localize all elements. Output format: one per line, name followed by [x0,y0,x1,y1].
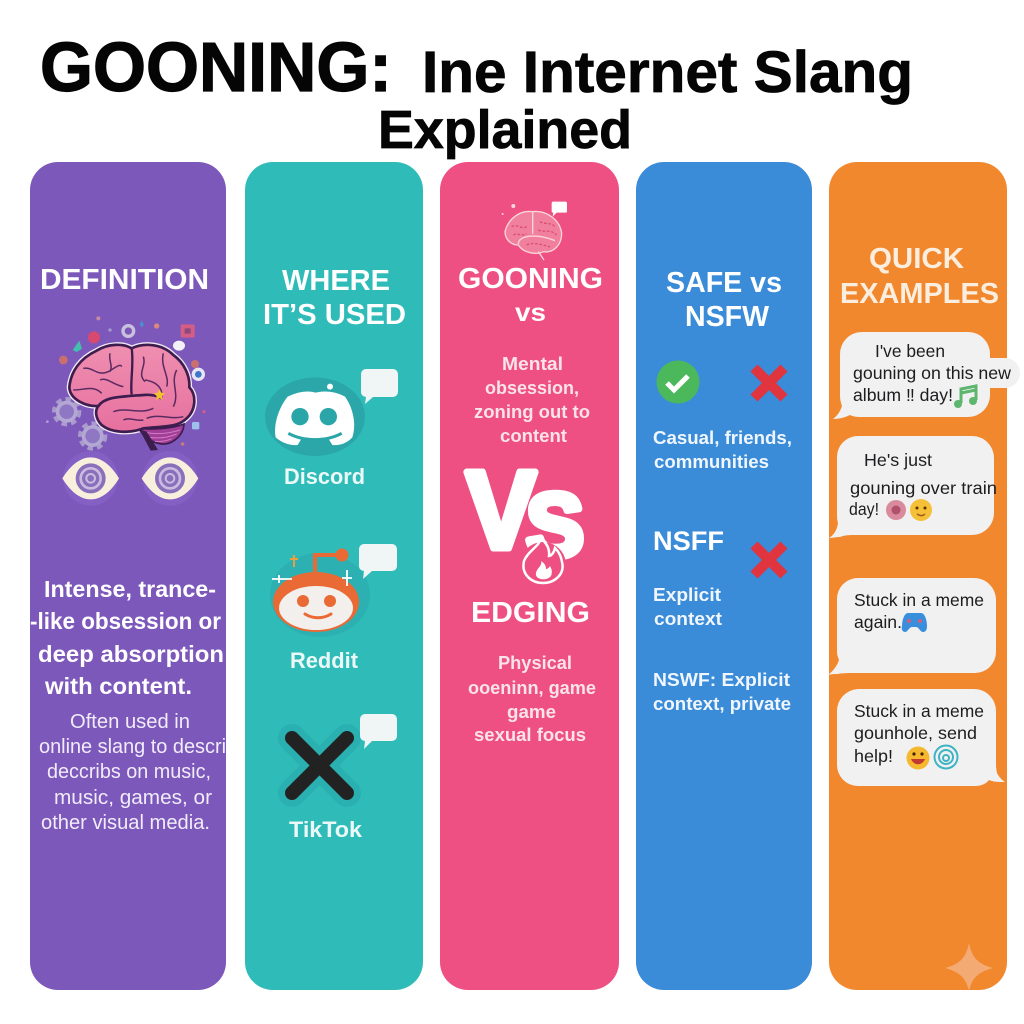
edging description: sexual focus [474,724,586,745]
graphic: VS with flame: V [466,449,536,572]
heading: where it's used: WHERE [282,265,390,297]
icon: chat bubble [361,369,398,404]
icon: chat bubble [360,714,397,749]
graphic: VS with flame [466,449,584,588]
chat bubble: album: album ‼ day! [853,385,953,405]
usage note: online slang to descri [39,736,226,758]
icon: music note [961,386,976,403]
icon: discord [265,377,365,456]
chat bubble: train day: gouning over train [850,478,997,498]
heading: safe vs nsfw: NSFW [685,301,770,333]
usage note: other visual media. [41,812,210,834]
heading: gooning vs: GOONING [458,263,603,295]
usage note: deccribs on music, [47,761,211,783]
panel: gooning vs edging [440,162,619,990]
chat bubble: meme again [828,578,996,675]
icon: reddit [270,548,370,637]
title: Ine Internet Slang [422,40,913,105]
heading: quick examples: EXAMPLES [840,278,999,310]
title [40,28,913,160]
icon: brain with gears and eyes [46,316,206,506]
chat bubble: meme again: Stuck in a meme [854,590,984,610]
heading: edging: EDGING [471,597,590,629]
heading: safe vs nsfw [666,267,782,333]
icon: green check [656,360,700,404]
chat bubble: train day: day! [849,499,879,519]
definition text: Intense, trance- [44,576,216,602]
explicit context text [653,584,722,629]
definition text [30,576,224,699]
nsfw note [653,669,791,714]
heading: gooning vs: vs [515,299,546,327]
heading: where it's used: IT’S USED [263,299,406,331]
brain halo [69,345,194,432]
chat bubble: meme rabbit hole: Stuck in a meme [854,701,984,721]
edging description: ooeninn, game [468,677,596,698]
icon: brain [502,202,567,260]
usage note: Often used in [70,711,190,733]
panel: where it's used [245,162,423,990]
brain [69,345,194,432]
chat bubble: meme rabbit hole: help! [854,746,893,766]
graphic: VS with flame: S [526,476,584,576]
gears [55,326,134,447]
gooning description: content [500,425,567,446]
cerebellum [138,424,184,444]
confetti [88,331,100,343]
explicit context text: Explicit [653,584,721,605]
gooning description: obsession, [485,377,579,398]
label: tiktok: TikTok [289,817,363,842]
chat bubble: meme rabbit hole: gounhole, send [854,723,977,743]
safe description [653,427,792,472]
heading: gooning vs [458,263,603,327]
icon: x mark [292,738,347,793]
chat bubble: meme again: again. [854,612,902,632]
definition text: deep absorption [38,641,224,667]
title: Explained [378,100,632,160]
usage note [39,711,226,834]
panel: safe vs nsfw [636,162,812,990]
explicit context text: context [654,608,722,629]
edging description: Physical [498,652,572,673]
chat bubble: meme rabbit hole [837,689,1005,786]
heading: quick examples [840,243,999,310]
panel: quick examples [828,162,1020,991]
usage note: music, games, or [54,787,212,809]
heading: quick examples: QUICK [869,243,964,275]
label: discord: Discord [284,464,365,489]
panel: definition [30,162,226,990]
chat bubble: train day [829,436,997,538]
heading: definition: DEFINITION [40,264,209,296]
gooning description [474,353,590,446]
heading: where it's used [263,265,406,331]
chat bubble: album: gouning on this new [853,363,1011,383]
safe description: communities [654,451,769,472]
edging description: game [507,701,556,722]
heading: nsff: NSFF [653,526,724,556]
chat bubble: album: I've been [875,341,945,361]
icon: game controller [902,613,927,632]
icon: red cross [754,545,784,575]
definition text: -like obsession or [30,608,221,634]
icon: red cross [754,368,784,398]
gooning description: zoning out to [474,401,590,422]
label: reddit: Reddit [290,648,359,673]
title: GOONING: [40,28,392,106]
icon: small emoji pair [886,499,932,521]
gooning description: Mental [502,353,563,374]
edging description [468,652,596,745]
icon: hypnotic left eye [62,451,119,506]
icon: spiral [934,746,958,768]
safe description: Casual, friends, [653,427,792,448]
definition text: with content. [44,673,192,699]
icon: chat bubble [359,544,397,579]
icon: hypnotic right eye [142,451,198,506]
chat bubble: album [833,332,1020,419]
chat bubble: train day: He's just [864,450,932,470]
nsfw note: NSWF: Explicit [653,669,790,690]
icon: sparkle [945,943,993,991]
heading: safe vs nsfw: SAFE vs [666,267,782,299]
nsfw note: context, private [653,693,791,714]
icon: grinning emoji [906,746,930,770]
